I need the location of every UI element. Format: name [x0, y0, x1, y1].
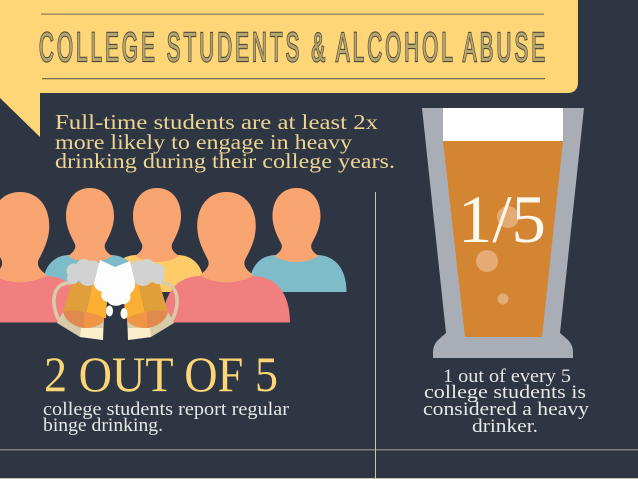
- stat: 1 out of 5 description: drinker.: [472, 416, 538, 437]
- stat: 1 out of 5 description: 1 out of every 5: [443, 366, 571, 387]
- bubbles: [476, 206, 519, 304]
- intro text: [55, 110, 395, 173]
- person: back centre, yellow shirt: [109, 188, 205, 292]
- left mug: [54, 259, 108, 340]
- intro text: more likely to engage in heavy: [55, 130, 353, 154]
- beer glass: [422, 108, 584, 358]
- grey foam: [66, 259, 102, 286]
- intro text: Full-time students are at least 2x: [55, 110, 379, 134]
- foam drops: [106, 306, 128, 319]
- stat: 1 out of 5 description: [423, 366, 590, 437]
- divider lines: [0, 192, 638, 479]
- clinking beer mugs: [54, 259, 177, 340]
- person: back left, blue shirt: [42, 188, 140, 292]
- stat description: [43, 399, 290, 436]
- person: front left, pink shirt: [0, 192, 83, 323]
- speech bubble banner: [0, 0, 578, 137]
- intro text: drinking during their college years.: [55, 149, 395, 173]
- title: COLLEGE STUDENTS & ALCOHOL ABUSE: [39, 24, 545, 70]
- person: back right, blue shirt: [248, 188, 346, 292]
- stat: 2 out of 5: 2 OUT OF 5: [44, 346, 278, 402]
- title: COLLEGE STUDENTS & ALCOHOL ABUSE: [39, 24, 545, 70]
- stat description: college students report regular: [43, 399, 290, 420]
- grey foam: [130, 259, 164, 286]
- stat description: binge drinking.: [43, 415, 163, 436]
- stat: 1 out of 5 description: college students is: [424, 382, 586, 403]
- stat: 2 out of 5: [43, 346, 290, 436]
- fraction label: 1/5: [458, 181, 546, 257]
- group of people: [0, 188, 346, 323]
- stat: 1 out of 5 description: considered a heavy: [423, 399, 590, 420]
- white foam: [94, 260, 135, 306]
- person: front right, pink shirt: [163, 192, 290, 323]
- right mug: [123, 259, 177, 340]
